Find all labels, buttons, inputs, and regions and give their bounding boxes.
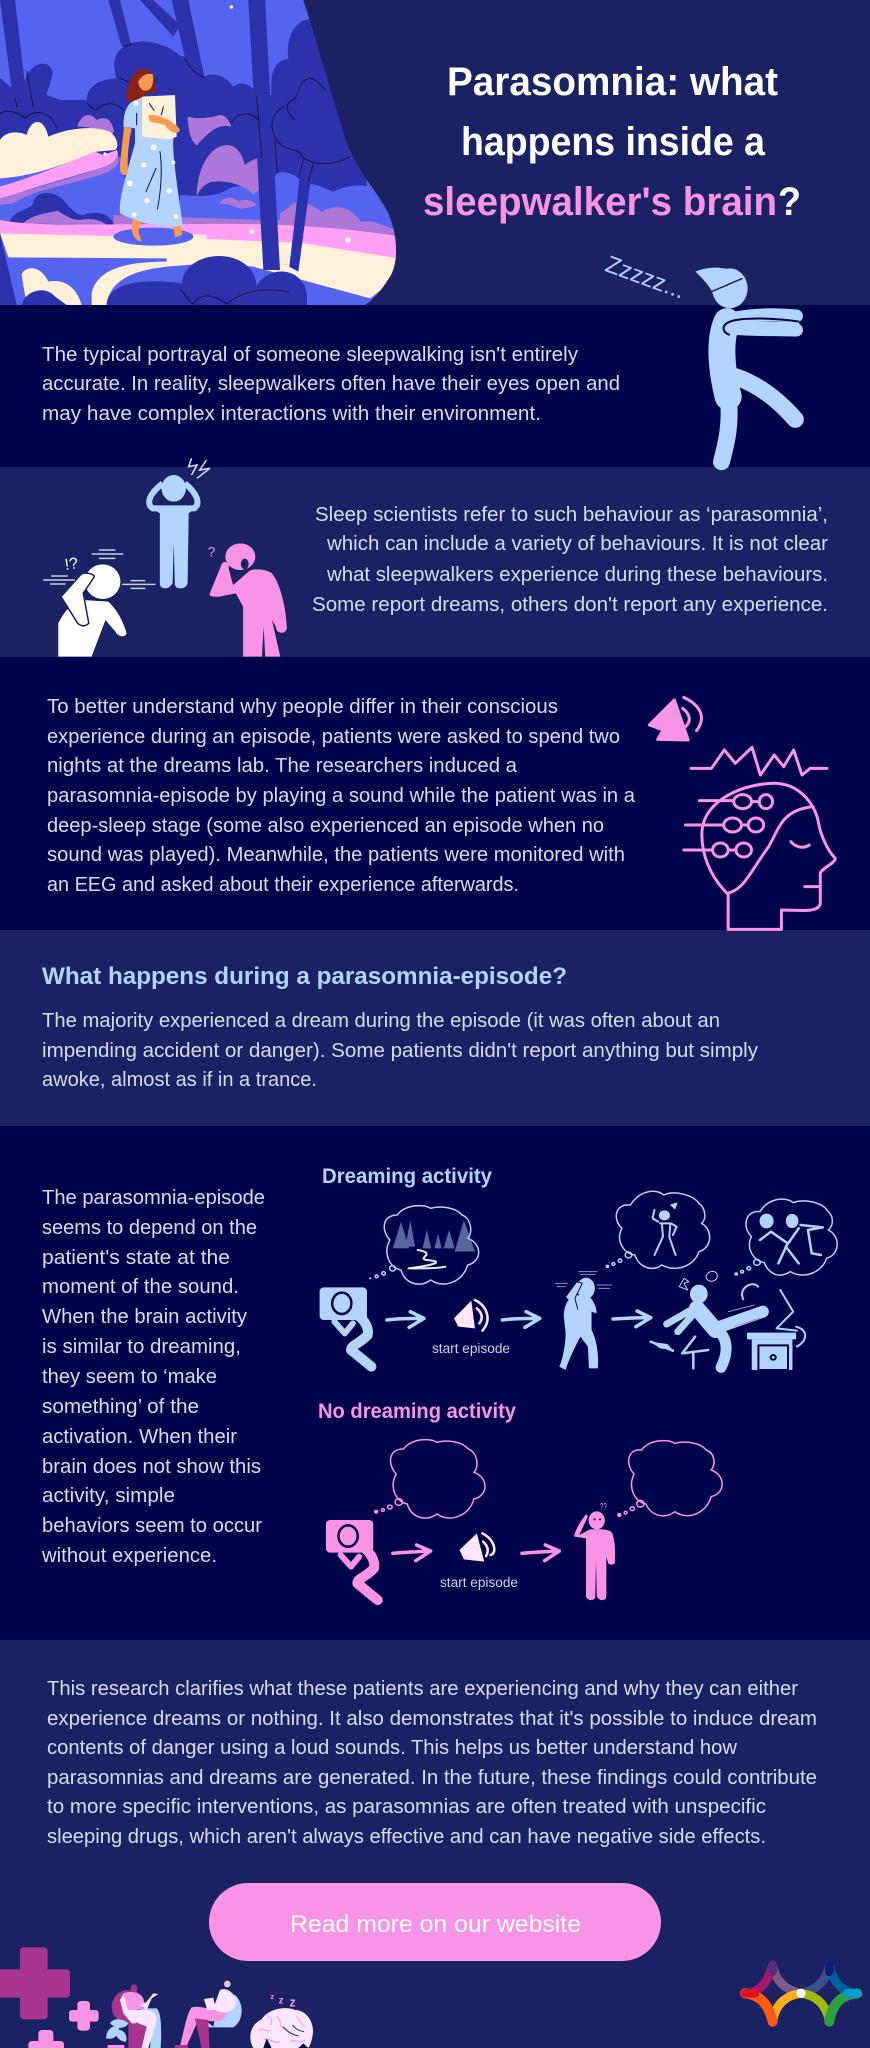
- figure: white person with lines: !?: [64, 555, 79, 574]
- button: read more: Read more on our website: [290, 1911, 581, 1938]
- icon: large magenta cross: [0, 1947, 70, 2019]
- title: ?: [778, 180, 801, 224]
- icon: empty thought cloud: [375, 1440, 485, 1518]
- text: conclusion paragraph: This research clarifies what these patients are experiencing and why they can either: [47, 1677, 798, 1700]
- title: [423, 60, 801, 224]
- text: parasomnia definition: Some report dreams, others don't report any experience.: [312, 593, 828, 616]
- figure: pink person scratching head: [208, 543, 287, 657]
- text: left explanation column: [41, 1186, 265, 1567]
- text: experiment paragraph: nights at the dreams lab. The researchers induced a: [47, 754, 518, 777]
- text: conclusion paragraph: sleeping drugs, which aren't always effective and can have negative side effects.: [47, 1825, 766, 1848]
- text: left explanation column: patient's state at the: [42, 1246, 230, 1269]
- label: start episode: start episode: [432, 1341, 510, 1356]
- panel: what happens band: [0, 930, 870, 1126]
- text: left explanation column: The parasomnia-episode: [42, 1186, 265, 1209]
- icon: speaker, EEG wave and head with electrodes: [649, 697, 835, 929]
- text: conclusion paragraph: contents of danger using a loud sounds. This helps us better understand how: [47, 1736, 737, 1759]
- text: experiment paragraph: an EEG and asked about their experience afterwards.: [47, 873, 519, 896]
- text: left explanation column: activation. When their: [42, 1425, 237, 1448]
- panel: header background: [0, 0, 870, 305]
- panel: experiment band: [0, 657, 870, 930]
- text: experiment paragraph: To better understand why people differ in their conscious: [47, 695, 558, 718]
- panel: conclusion band: [0, 1640, 870, 2048]
- text: intro paragraph: may have complex interactions with their environment.: [42, 402, 541, 425]
- text: left explanation column: seems to depend on the: [42, 1216, 257, 1239]
- figure: seated man with book: [175, 1981, 242, 2048]
- text: experiment paragraph: [47, 695, 636, 896]
- figure: pink person scratching head: ?: [208, 544, 216, 560]
- arrow: [502, 1312, 540, 1327]
- icon: thought cloud with forest: [369, 1206, 479, 1284]
- text: intro paragraph: [42, 343, 620, 425]
- arrow: [387, 1312, 424, 1327]
- text: left explanation column: without experience.: [41, 1544, 217, 1567]
- arrow: [393, 1545, 431, 1561]
- title: Parasomnia: what: [447, 60, 778, 104]
- icon: desk with monitor: [742, 1284, 805, 1370]
- icon: sleepwalker figure with Zzzzz: [602, 251, 799, 462]
- diagram: no dreaming activity sequence: [326, 1440, 722, 1600]
- panel: parasomnia definition band: [0, 467, 870, 657]
- text: conclusion paragraph: [47, 1677, 817, 1848]
- text: left explanation column: is similar to dreaming,: [42, 1335, 241, 1358]
- text: conclusion paragraph: parasomnias and dreams are generated. In the future, these findings could contribute: [47, 1766, 817, 1789]
- icon: speaker: [459, 1533, 494, 1562]
- text: parasomnia definition: Sleep scientists refer to such behaviour as ‘parasomnia’,: [315, 503, 828, 526]
- icon: sleeping person on pillow: [320, 1287, 371, 1367]
- heading: no dreaming activity: No dreaming activity: [318, 1400, 516, 1423]
- panel: dreaming comparison band: [0, 1126, 870, 1640]
- illustration: three confused figures: [43, 458, 287, 657]
- text: left explanation column: behaviors seem to occur: [42, 1514, 262, 1537]
- text: left explanation column: activity, simple: [42, 1484, 175, 1507]
- icon: sleeping brain with zzz: z: [270, 1992, 274, 2001]
- icon: sleepwalker figure with Zzzzz: Zzzzz...: [602, 251, 689, 305]
- text: experiment paragraph: parasomnia-episode by playing a sound while the patient was in a: [47, 784, 636, 807]
- button: read more: [209, 1883, 661, 1961]
- illustration: woman sleepwalking in a forest: [0, 0, 400, 305]
- arrow: [522, 1545, 559, 1561]
- figure: blue person holding head: [149, 458, 210, 588]
- panel: intro band: [0, 305, 870, 467]
- label: start episode: start episode: [440, 1575, 518, 1590]
- text: left explanation column: they seem to ‘make: [42, 1365, 217, 1388]
- logo: multicoloured double star: [745, 1965, 857, 2022]
- text: parasomnia definition: [312, 503, 828, 616]
- text: what happens paragraph: impending accident or danger). Some patients didn't report anything but simply: [42, 1039, 759, 1062]
- icon: sleeping person on pillow: [326, 1520, 378, 1600]
- heading: dreaming activity: Dreaming activity: [322, 1165, 492, 1188]
- figure: white person with lines: [43, 550, 155, 657]
- figure: person kicking a desk: [651, 1271, 763, 1368]
- text: intro paragraph: accurate. In reality, sleepwalkers often have their eyes open and: [42, 372, 620, 395]
- title: sleepwalker's brain: [423, 180, 777, 224]
- text: left explanation column: brain does not show this: [42, 1455, 261, 1478]
- text: intro paragraph: The typical portrayal of someone sleepwalking isn't entirely: [42, 343, 579, 366]
- text: experiment paragraph: sound was played). Meanwhile, the patients were monitored with: [47, 843, 625, 866]
- icon: sleeping brain with zzz: z: [279, 1995, 284, 2006]
- text: what happens paragraph: awoke, almost as if in a trance.: [42, 1068, 317, 1091]
- text: conclusion paragraph: experience dreams or nothing. It also demonstrates that it's possible to induce dream: [47, 1707, 817, 1730]
- heading: what happens during an episode: What happens during a parasomnia-episode?: [42, 963, 567, 990]
- icon: thought cloud with figure: [606, 1191, 710, 1268]
- figure: confused person: ??: [600, 1501, 607, 1512]
- text: conclusion paragraph: to more specific interventions, as parasomnias are often treated with unspecific: [47, 1795, 766, 1818]
- figure: seated woman: [106, 1984, 161, 2048]
- text: left explanation column: moment of the sound.: [42, 1275, 239, 1298]
- icon: speaker: [454, 1300, 488, 1331]
- text: experiment paragraph: deep-sleep stage (some also experienced an episode when no: [47, 814, 604, 837]
- diagram: dreaming activity sequence: [320, 1191, 837, 1370]
- icon: small pink crosses: [28, 2001, 99, 2048]
- figure: startled person: [556, 1272, 612, 1370]
- text: experiment paragraph: experience during an episode, patients were asked to spend two: [47, 725, 620, 748]
- icon: sleeping brain with zzz: [250, 1992, 313, 2048]
- text: what happens paragraph: [42, 1009, 759, 1091]
- title: happens inside a: [461, 120, 766, 164]
- text: left explanation column: something’ of the: [42, 1395, 199, 1418]
- text: left explanation column: When the brain activity: [42, 1305, 248, 1328]
- decoration: footer illustration with crosses, people and brain: [0, 1947, 313, 2048]
- icon: empty thought cloud: [618, 1441, 722, 1516]
- text: parasomnia definition: what sleepwalkers experience during these behaviours.: [326, 563, 828, 586]
- text: parasomnia definition: which can include a variety of behaviours. It is not clear: [326, 532, 828, 555]
- arrow: [613, 1311, 651, 1327]
- icon: thought cloud with fighting figures: [735, 1199, 837, 1275]
- figure: confused person: [574, 1501, 615, 1600]
- icon: sleeping brain with zzz: z: [289, 1996, 296, 2010]
- text: what happens paragraph: The majority experienced a dream during the episode (it was often about an: [42, 1009, 720, 1032]
